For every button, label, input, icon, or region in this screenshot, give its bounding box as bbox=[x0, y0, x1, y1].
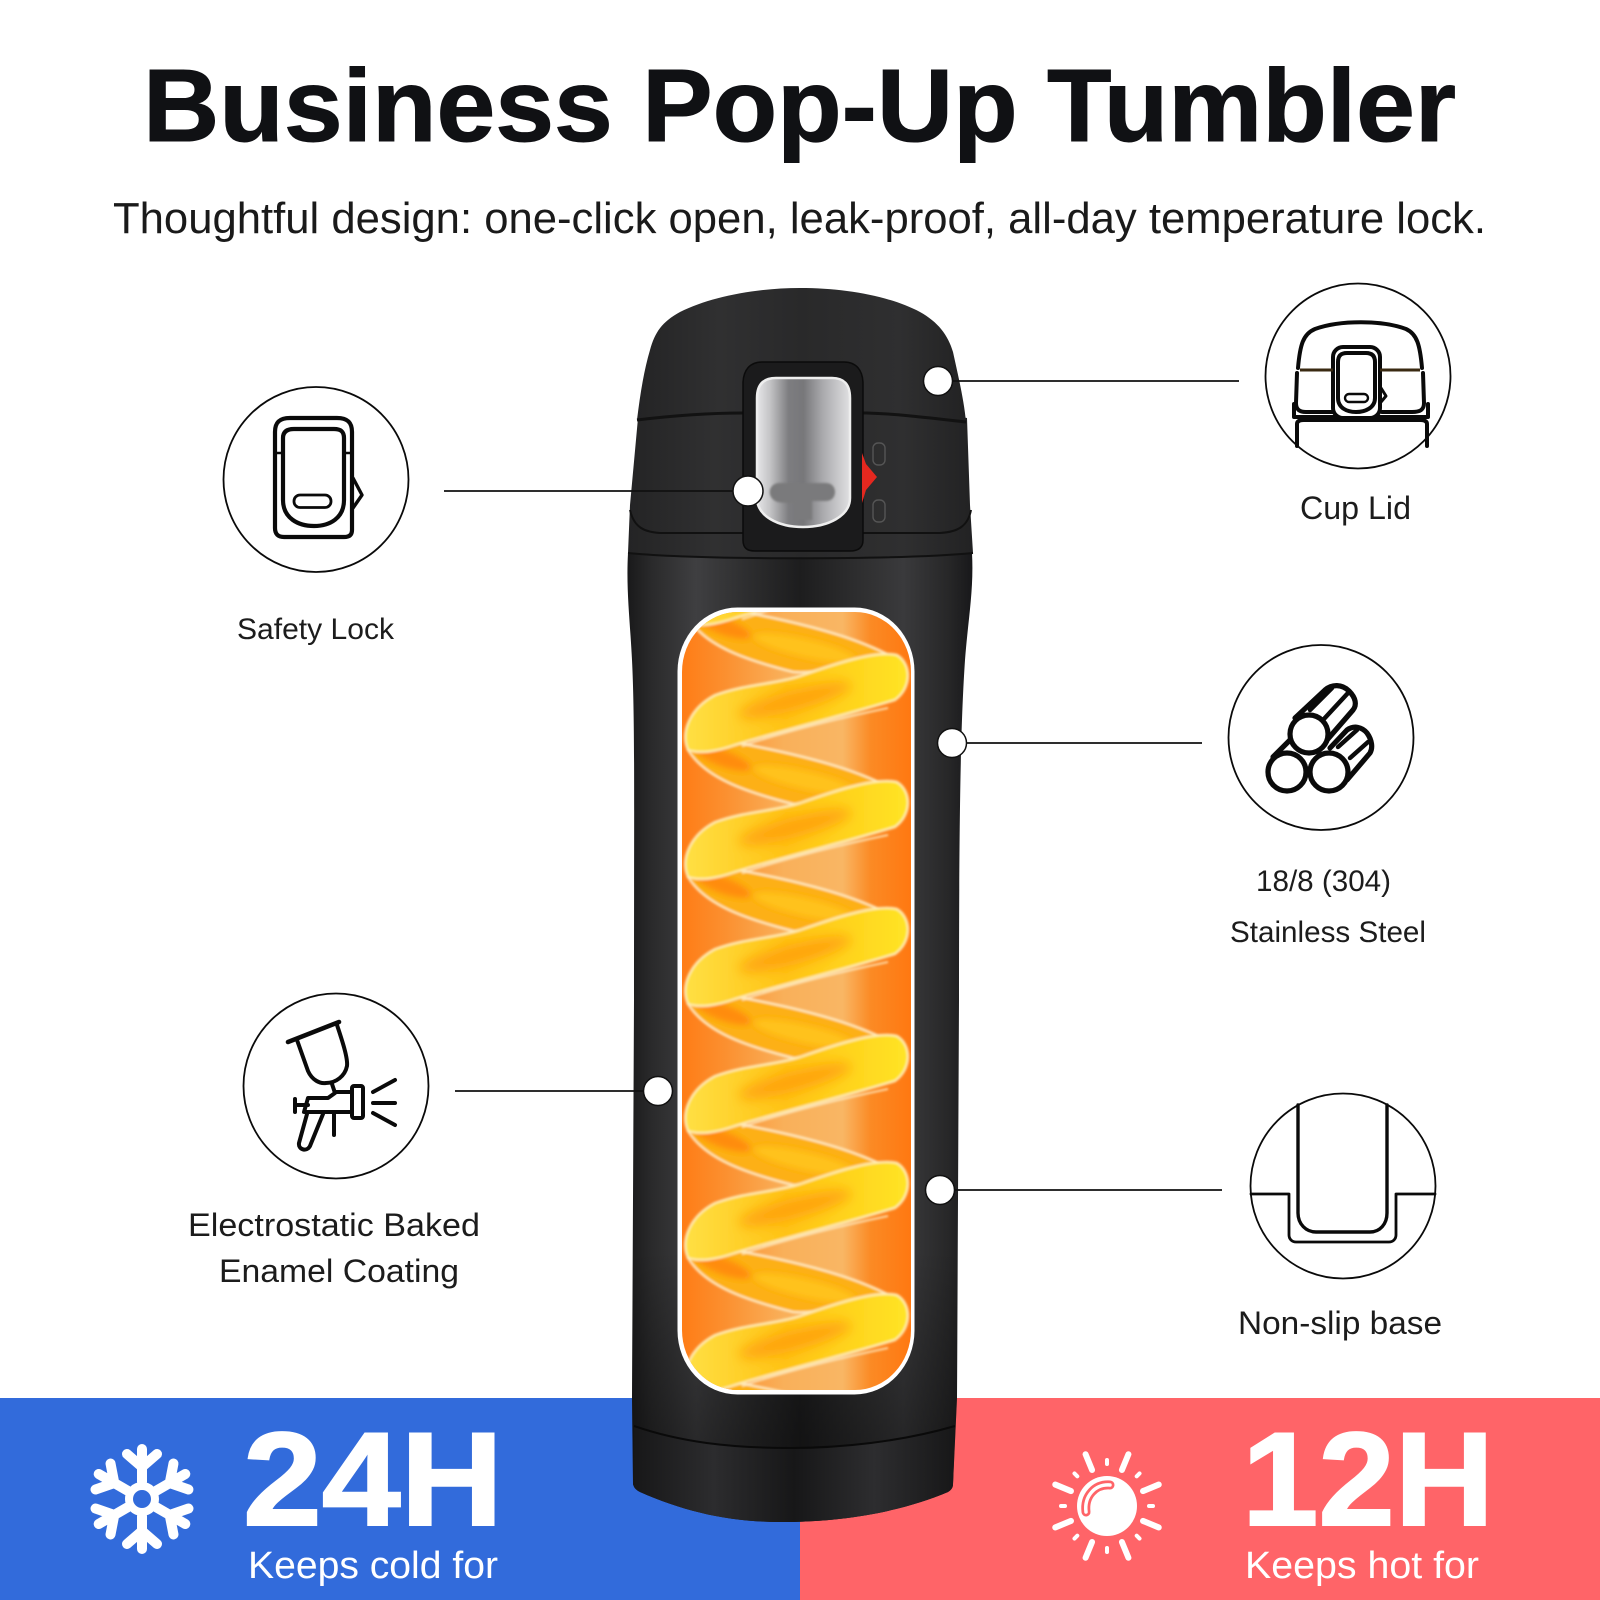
silver push button bbox=[757, 378, 850, 527]
icon: sun bbox=[1055, 1454, 1159, 1558]
blue cold banner bbox=[0, 1398, 800, 1600]
lock symbols bbox=[873, 443, 885, 522]
stat caption: keeps cold: Keeps cold for bbox=[248, 1545, 498, 1587]
lid seam bbox=[637, 413, 966, 422]
icon: base cross-section bbox=[1251, 1105, 1435, 1242]
red lock indicator bbox=[862, 453, 877, 503]
button slot bbox=[770, 483, 835, 520]
subtitle: Thoughtful design: one-click open, leak-proof, all-day temperature lock. bbox=[113, 194, 1486, 243]
lid collar bbox=[628, 408, 973, 558]
label: safety lock: Safety Lock bbox=[237, 613, 395, 646]
icon: steel tubes bbox=[1268, 686, 1372, 791]
callout: safety lock bbox=[224, 387, 763, 646]
stat: 12H: 12H bbox=[1242, 1406, 1494, 1554]
label: coating line one: Electrostatic Baked bbox=[188, 1207, 480, 1243]
red hot banner bbox=[800, 1398, 1600, 1600]
icon: spray gun bbox=[288, 1022, 395, 1150]
label: non-slip base: Non-slip base bbox=[1238, 1305, 1442, 1341]
label: cup lid: Cup Lid bbox=[1300, 490, 1411, 526]
tumbler product bbox=[627, 288, 973, 1522]
callout: cup lid bbox=[924, 284, 1450, 526]
stat: 24H: 24H bbox=[243, 1406, 503, 1554]
heat helix bbox=[682, 612, 911, 1390]
insulation window bbox=[678, 608, 914, 1394]
callout: stainless steel bbox=[938, 645, 1426, 949]
icon: safety lock bbox=[275, 418, 362, 537]
tumbler body bbox=[627, 553, 972, 1522]
stat caption: keeps hot: Keeps hot for bbox=[1245, 1545, 1479, 1587]
callout: non-slip base bbox=[926, 1094, 1442, 1341]
tumbler lower shading bbox=[632, 1250, 958, 1522]
lid dome bbox=[637, 288, 966, 422]
label: stainless steel: Stainless Steel bbox=[1230, 916, 1426, 949]
orange background bbox=[679, 609, 913, 1393]
icon: cup lid bbox=[1294, 322, 1428, 446]
callout: enamel coating bbox=[188, 994, 672, 1289]
label: coating line two: Enamel Coating bbox=[219, 1253, 459, 1289]
base ridge bbox=[634, 1426, 955, 1448]
collar seam bbox=[628, 510, 973, 558]
latch housing bbox=[743, 362, 863, 551]
title: Business Pop-Up Tumbler bbox=[143, 48, 1456, 163]
tumbler base bbox=[633, 1426, 955, 1522]
label: steel grade: 18/8 (304) bbox=[1256, 865, 1391, 898]
icon: snowflake bbox=[91, 1449, 193, 1549]
